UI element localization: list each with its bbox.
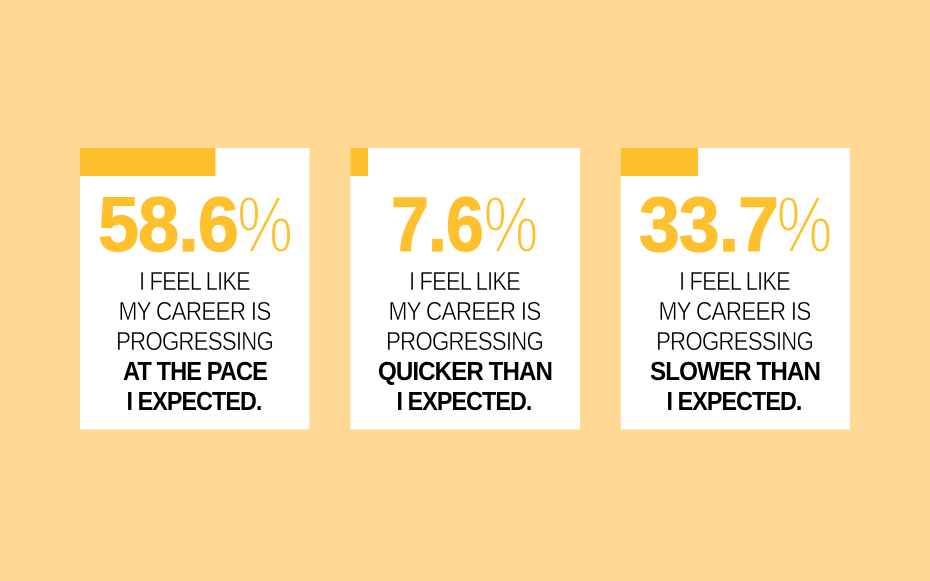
text block: quicker than statement: I EXPECTED. — [396, 386, 532, 416]
statistic: 58.6 percent: 58.6 — [98, 182, 238, 268]
statistic: 33.7 percent: % — [776, 180, 832, 269]
text block: quicker than statement: I FEEL LIKE — [409, 266, 521, 296]
text block: quicker than statement: PROGRESSING — [386, 326, 543, 356]
text block: at the pace statement: I EXPECTED. — [126, 386, 262, 416]
text block: at the pace statement: AT THE PACE — [123, 356, 268, 386]
text block: slower than statement: SLOWER THAN — [650, 356, 820, 386]
card background — [350, 148, 580, 430]
statistic: 7.6 percent — [391, 180, 538, 269]
text block: slower than statement: I EXPECTED. — [666, 386, 802, 416]
text block: slower than statement: I FEEL LIKE — [679, 266, 791, 296]
text block: quicker than statement: MY CAREER IS — [388, 296, 541, 326]
card background — [80, 148, 310, 430]
text block: slower than statement: PROGRESSING — [656, 326, 813, 356]
text block: at the pace statement: MY CAREER IS — [118, 296, 271, 326]
panel: slower than — [621, 148, 850, 430]
text block: quicker than statement: QUICKER THAN — [378, 356, 552, 386]
progress bar: 33.7 percent — [621, 148, 698, 176]
text block: at the pace statement: PROGRESSING — [116, 326, 273, 356]
text block: at the pace statement: I FEEL LIKE — [139, 266, 251, 296]
panel: quicker than — [350, 148, 580, 430]
statistic: 58.6 percent: % — [237, 180, 293, 269]
progress bar: 7.6 percent — [350, 148, 368, 176]
card background — [621, 148, 850, 430]
progress bar: 58.6 percent — [80, 148, 216, 176]
text block: quicker than statement — [378, 266, 552, 416]
statistic: 7.6 percent: % — [484, 180, 538, 269]
statistic: 7.6 percent: 7.6 — [391, 182, 483, 268]
text block: slower than statement — [650, 266, 820, 416]
text block: slower than statement: MY CAREER IS — [658, 296, 811, 326]
panel: at the pace — [80, 148, 310, 430]
text block: at the pace statement — [116, 266, 273, 416]
statistic: 33.7 percent: 33.7 — [639, 182, 778, 268]
